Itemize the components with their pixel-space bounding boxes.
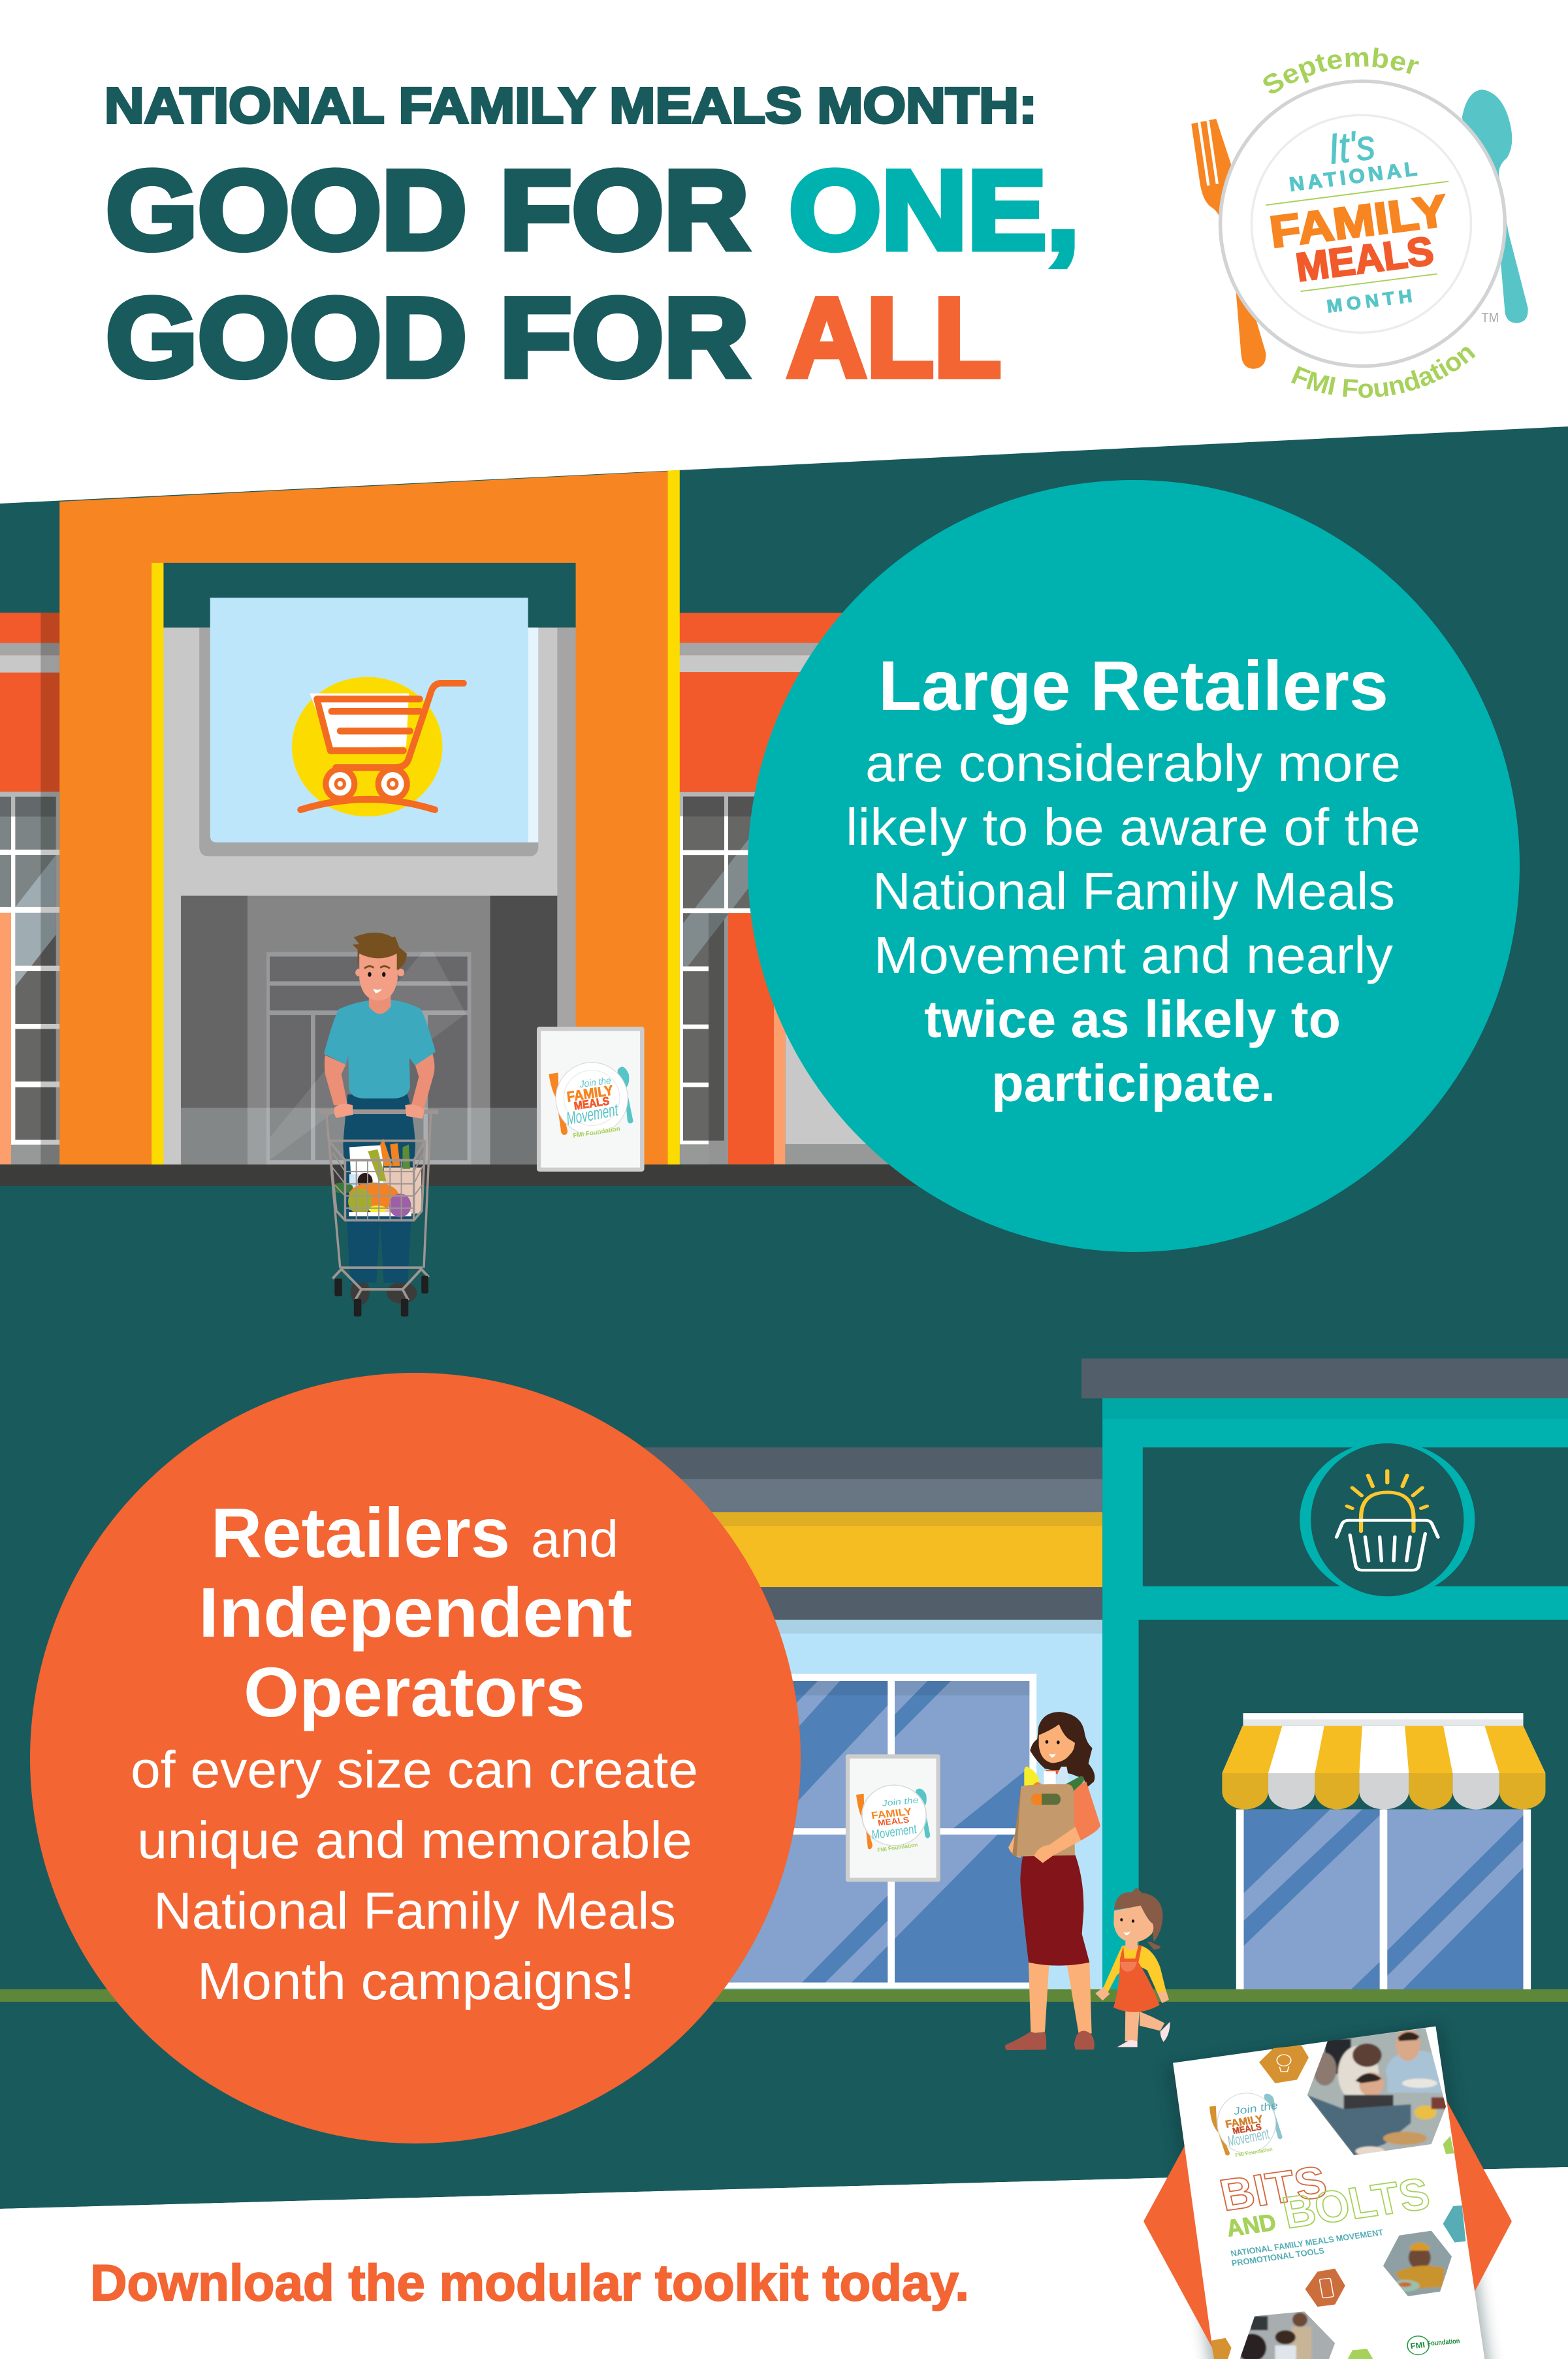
eyebrow heading: NATIONAL FAMILY MEALS MONTH: xyxy=(104,78,1037,134)
plate wording: It's xyxy=(1326,121,1378,174)
icon: fork xyxy=(1191,119,1266,369)
yellow facade strip xyxy=(668,470,680,1164)
teal store roof xyxy=(1081,1358,1568,1398)
photo: family cooking xyxy=(1236,2310,1336,2359)
toolkit title: Bits and Bolts: BITS xyxy=(1215,2157,1331,2221)
icon: shopping cart xyxy=(292,677,464,816)
toolkit logo: FMI Foundation xyxy=(1234,2146,1273,2158)
title line one: ONE, xyxy=(789,148,1080,273)
title line two: GOOD FOR xyxy=(106,275,749,400)
panel: large retailers circle xyxy=(748,480,1520,1252)
body text: awareness xyxy=(846,734,1420,984)
icon: plate xyxy=(1221,81,1505,366)
body text: campaigns: of every size can create xyxy=(131,1741,698,1799)
right neighbouring building xyxy=(679,613,919,1164)
teal store building xyxy=(1102,1398,1568,1989)
FMI Foundation mark: Foundation xyxy=(1427,2337,1460,2348)
independent store window xyxy=(705,1674,1036,1988)
store window with awning xyxy=(1222,1713,1545,1989)
woman with grocery bag xyxy=(1005,1712,1100,2050)
poster: join the family meals movement: FMI Foundation xyxy=(573,1125,620,1140)
title line one xyxy=(106,148,1080,273)
cart groceries xyxy=(332,1138,421,1217)
window poster: FMI Foundation xyxy=(877,1842,918,1854)
store sign panel xyxy=(199,598,538,856)
small retailer storefronts xyxy=(641,1358,1568,1989)
sidewalk edge xyxy=(0,1164,921,1186)
plate wording: MONTH xyxy=(1326,286,1413,316)
toolkit logo: Join the xyxy=(1232,2100,1279,2117)
title line two: ALL xyxy=(787,275,1001,400)
shopper hands xyxy=(334,1104,424,1119)
window poster: Movement xyxy=(870,1821,919,1842)
entrance wall xyxy=(163,628,576,1164)
plate wording xyxy=(1266,121,1499,325)
heading: retailers and independent operators xyxy=(199,1493,632,1731)
FMI Foundation mark xyxy=(1407,2336,1460,2355)
heading: retailers and independent operators: and xyxy=(531,1510,618,1568)
photo: girl eating xyxy=(1382,2230,1453,2298)
awning xyxy=(1222,1713,1545,1809)
man shopper xyxy=(324,933,436,1305)
plate wording: TM xyxy=(1481,311,1499,325)
body text: awareness: National Family Meals xyxy=(872,862,1395,920)
icon: spoon xyxy=(1462,89,1528,323)
toolkit page xyxy=(1173,2027,1493,2359)
dark teal street background xyxy=(0,426,1568,2209)
large retailer storefront xyxy=(0,470,921,1186)
title block xyxy=(104,78,1080,400)
FMI Foundation mark: FMI xyxy=(1410,2341,1426,2351)
poster: join the family meals movement xyxy=(537,1027,645,1172)
title line two xyxy=(106,275,1001,400)
child xyxy=(1095,1887,1170,2047)
woman and child xyxy=(1005,1712,1170,2050)
shopper with cart and sign xyxy=(319,933,645,1317)
window poster: MEALS xyxy=(877,1816,910,1828)
yellow entrance trim xyxy=(152,563,163,1164)
emphasis: twice as likely xyxy=(924,990,1341,1112)
body text: awareness: are considerably more xyxy=(865,734,1401,792)
shopping cart frame xyxy=(319,1110,438,1300)
toolkit title: Bits and Bolts: AND xyxy=(1224,2209,1279,2241)
toolkit title: Bits and Bolts xyxy=(1215,2157,1434,2269)
entrance header xyxy=(163,563,576,628)
poster: join the family meals movement: MEALS xyxy=(573,1095,610,1112)
heading: retailers and independent operators: Retailers xyxy=(211,1493,510,1572)
panel: retailers and independent operators circle xyxy=(30,1373,801,2143)
store badge xyxy=(1300,1441,1475,1599)
body text: campaigns: unique and memorable xyxy=(137,1811,692,1869)
store entrance doors xyxy=(181,896,557,1164)
call to action: Download the modular toolkit today. xyxy=(90,2254,969,2311)
emphasis: twice as likely: twice as likely to xyxy=(924,990,1341,1048)
green lawn strip xyxy=(0,1989,1568,2002)
heading: retailers and independent operators: Independent xyxy=(199,1573,632,1652)
bottom white band xyxy=(0,2167,1568,2359)
window poster xyxy=(846,1754,940,1882)
independent store fascia xyxy=(641,1447,1102,1989)
cart wheels xyxy=(334,1276,428,1317)
logo: National Family Meals Month plate: FMI Foundation xyxy=(1291,347,1476,398)
left neighbouring building xyxy=(0,613,59,1164)
heading: Large Retailers: Large Retailers xyxy=(878,646,1388,725)
poster: join the family meals movement: FAMILY xyxy=(566,1083,614,1105)
plate wording: MEALS xyxy=(1293,229,1436,290)
body text: campaigns xyxy=(131,1741,698,2010)
body text: awareness: Movement and nearly xyxy=(874,926,1393,984)
hexagon icons xyxy=(1211,2046,1465,2359)
plate wording: FAMILY xyxy=(1267,185,1450,257)
window poster: FAMILY xyxy=(871,1805,913,1821)
toolkit title: Bits and Bolts: NATIONAL FAMILY MEALS MOVEMENT xyxy=(1230,2228,1384,2258)
emphasis: twice as likely: participate. xyxy=(991,1054,1275,1112)
toolkit title: Bits and Bolts: PROMOTIONAL TOOLS xyxy=(1231,2247,1326,2269)
toolkit logo: Movement xyxy=(1226,2126,1272,2150)
plate wording: NATIONAL xyxy=(1288,157,1418,196)
body text: campaigns: National Family Meals xyxy=(153,1882,676,1940)
window poster: Join the xyxy=(880,1796,920,1808)
photo: family at table xyxy=(1305,2027,1449,2158)
toolkit logo: FAMILY xyxy=(1224,2113,1264,2130)
heading: retailers and independent operators: Operators xyxy=(244,1652,585,1731)
toolkit drop shadow xyxy=(1168,2025,1496,2359)
poster: join the family meals movement: Join the xyxy=(579,1076,612,1091)
toolkit logo xyxy=(1209,2093,1283,2158)
title line one: GOOD FOR xyxy=(106,148,749,273)
toolkit cover graphic xyxy=(1147,2025,1509,2359)
body text: campaigns: Month campaigns! xyxy=(197,1952,635,2010)
icon: basket with sun xyxy=(1337,1471,1438,1570)
orange hexagon backdrop xyxy=(1147,2074,1509,2359)
orange store facade xyxy=(59,472,668,1164)
logo: National Family Meals Month plate: September xyxy=(1263,47,1420,93)
poster: join the family meals movement: Movement xyxy=(565,1099,620,1129)
body text: awareness: likely to be aware of the xyxy=(846,798,1420,856)
logo: National Family Meals Month plate xyxy=(1191,47,1528,398)
curved text: FMI Foundation xyxy=(1211,266,1531,398)
toolkit logo: MEALS xyxy=(1232,2122,1262,2136)
curved text: September xyxy=(1215,67,1490,170)
toolkit title: Bits and Bolts: BOLTS xyxy=(1278,2168,1434,2238)
